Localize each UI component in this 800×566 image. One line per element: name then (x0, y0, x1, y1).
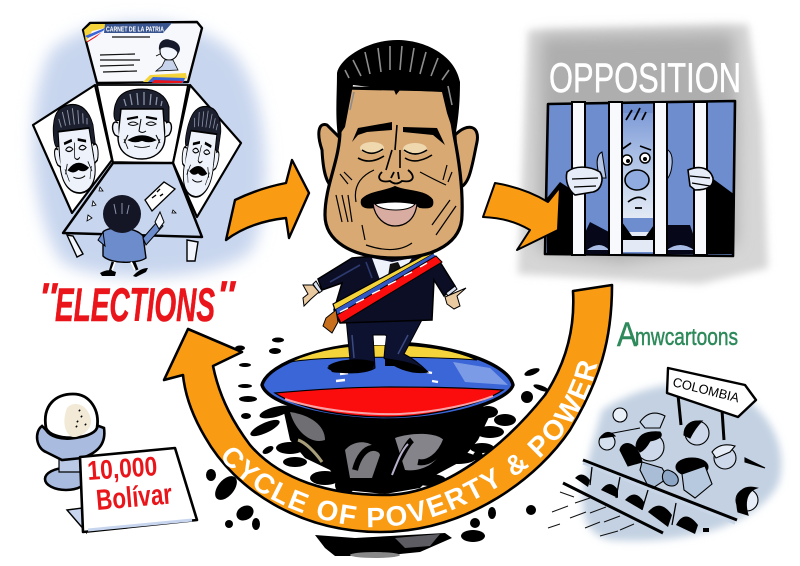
droplets (206, 338, 549, 542)
price sign (67, 448, 197, 532)
signature: @mwcartoons: A (617, 316, 637, 354)
poster: left face (33, 85, 112, 213)
panel: expensive egg (37, 394, 197, 532)
surfboard flag (262, 343, 513, 420)
boat railing (563, 460, 737, 534)
ID card (83, 22, 202, 83)
puddle mass (283, 402, 490, 494)
signature: @mwcartoons (617, 316, 738, 354)
wash: colombia blue grey (583, 384, 781, 541)
presidential sash (323, 252, 442, 333)
smiling mouth (373, 202, 417, 226)
voter girl (98, 195, 164, 277)
right ear and left ear (319, 124, 477, 188)
poster: right face (173, 85, 241, 217)
nose (379, 170, 413, 184)
yellow stripe (290, 345, 477, 362)
red stripe (275, 387, 503, 417)
jail window (545, 101, 735, 256)
ID card: CARNET DE LA PATRIA (106, 24, 164, 34)
eyebrows (352, 122, 445, 145)
jail bars (572, 102, 707, 255)
prisoner hands (566, 167, 713, 195)
heading: ELECTIONS: ELECTIONS (55, 278, 215, 331)
signpost (667, 368, 756, 440)
legs and shoes (328, 316, 428, 373)
heading: ELECTIONS (38, 272, 237, 331)
price sign: Bolívar (95, 478, 173, 517)
closed eyes (360, 142, 384, 154)
water ripples (548, 492, 634, 536)
table (63, 163, 202, 261)
panel: ink puddle (206, 338, 549, 558)
band text guide (218, 365, 597, 527)
prisoner (597, 108, 672, 252)
band text: CYCLE OF POVERTY & POWER (223, 361, 598, 528)
blobs around puddle (248, 403, 516, 494)
moustache (362, 187, 432, 207)
panel: elections voting booth (33, 22, 241, 277)
signature: @mwcartoons: mwcartoons (635, 324, 738, 351)
crowd (599, 408, 765, 515)
wash: prison dark grey (538, 32, 738, 262)
hair (336, 40, 460, 137)
egg (45, 394, 98, 438)
poster: centre face (97, 85, 188, 163)
heading: ELECTIONS: " (216, 272, 237, 319)
arrow: elections to president (226, 160, 309, 240)
figure: president caricature (303, 40, 477, 373)
jacket (318, 252, 455, 323)
wash: prison light grey (518, 24, 768, 284)
grey swirls (290, 412, 446, 478)
panel: opposition in jail (545, 54, 741, 256)
egg cup (37, 425, 104, 490)
panel: colombia border (548, 368, 765, 536)
price sign: 10,000 (86, 451, 158, 486)
lower splash (315, 533, 452, 556)
arrow: president to opposition (483, 183, 560, 250)
flag stars (336, 366, 438, 382)
wash: voting booth blue (33, 22, 265, 277)
arrow band: cycle of poverty and power (162, 284, 614, 534)
cheek lines (336, 165, 456, 250)
cuffs and hands (303, 281, 466, 309)
signpost: COLOMBIA (671, 374, 741, 405)
face (325, 40, 462, 258)
shine (453, 362, 508, 385)
heading: ELECTIONS: " (38, 274, 59, 321)
